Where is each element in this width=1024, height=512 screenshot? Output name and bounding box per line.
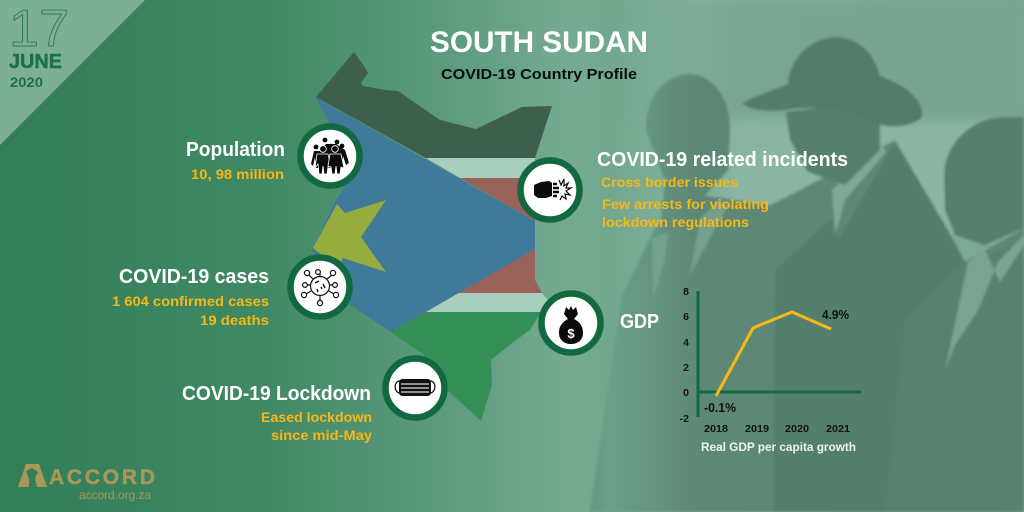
date block — [9, 0, 69, 90]
y axis labels: 0 — [683, 387, 689, 399]
data label 2018: -0.1% — [704, 401, 736, 415]
icon: mask — [386, 358, 444, 418]
incident item: border: Cross border issues — [601, 174, 738, 190]
panel: COVID-19 cases — [112, 258, 350, 328]
photo backdrop foliage — [620, 0, 1024, 232]
month: JUNE — [9, 51, 62, 73]
subtitle: COVID-19 Country Profile — [441, 66, 637, 83]
map: South Sudan flag in country outline — [312, 52, 552, 421]
incident item: arrests: Few arrests for violating — [602, 196, 769, 212]
map band: lower red — [458, 249, 542, 293]
figures base — [590, 140, 1024, 512]
logo wordmark: ACCORD — [49, 466, 155, 489]
icon: people — [300, 126, 360, 186]
y axis labels: 4 — [683, 337, 689, 349]
title: SOUTH SUDAN — [430, 26, 648, 59]
y axis labels: 6 — [683, 311, 689, 323]
logo url: accord.org.za — [79, 488, 151, 502]
GDP heading: GDP — [620, 311, 659, 333]
x axis labels: 2020 — [785, 423, 809, 435]
icon: virus — [290, 258, 350, 316]
left man shirt — [652, 200, 728, 300]
y axis labels — [680, 286, 689, 425]
right man shirt — [945, 235, 1024, 370]
deaths value: 19 deaths — [200, 312, 269, 328]
map band: blue triangle — [312, 97, 535, 332]
panel: GDP — [542, 286, 861, 454]
x axis labels: 2019 — [745, 423, 769, 435]
background photo: three men — [590, 0, 1024, 512]
centre man hat — [742, 37, 922, 126]
x axis labels: 2021 — [826, 423, 850, 435]
date corner triangle — [0, 0, 145, 145]
centre man collar — [832, 142, 886, 235]
cases value: 1 604 confirmed cases — [112, 293, 269, 309]
chart axes — [698, 291, 861, 417]
logo mark — [18, 464, 47, 487]
population value: 10, 98 million — [191, 166, 284, 182]
panel: COVID-19 related incidents — [520, 149, 848, 230]
y axis labels: -2 — [680, 413, 689, 425]
centre man face — [786, 100, 880, 185]
lockdown heading: COVID-19 Lockdown — [182, 383, 371, 405]
y axis labels: 8 — [683, 286, 689, 298]
logo: ACCORD — [18, 464, 155, 502]
left fade over photo — [560, 0, 700, 512]
lockdown status: since mid-May — [271, 427, 372, 443]
panel: population — [186, 126, 360, 186]
data line — [716, 312, 831, 396]
line chart: real GDP per capita growth — [680, 286, 861, 454]
map band: upper red — [460, 178, 535, 221]
right man suit — [885, 240, 1024, 512]
chart caption: Real GDP per capita growth — [701, 440, 856, 454]
right man head — [944, 117, 1024, 245]
map band: lower white — [426, 293, 549, 312]
year: 2020 — [10, 74, 43, 90]
data label 2021: 4.9% — [822, 308, 849, 322]
panel: COVID-19 lockdown — [182, 358, 444, 443]
map star — [313, 200, 386, 272]
incident item: arrests: lockdown regulations — [602, 214, 749, 230]
x axis labels — [704, 423, 850, 435]
map band: green — [391, 312, 541, 421]
map band: black — [316, 52, 552, 158]
icon: money bag — [542, 294, 600, 352]
population heading: Population — [186, 139, 285, 161]
x axis labels: 2018 — [704, 423, 728, 435]
icon: money bag: $ — [567, 326, 575, 341]
y axis labels: 2 — [683, 362, 689, 374]
lockdown status: Eased lockdown — [261, 409, 372, 425]
cases heading: COVID-19 cases — [119, 266, 269, 288]
map band: upper white — [426, 158, 535, 178]
left man head — [646, 74, 730, 235]
date number: 17 — [9, 0, 69, 58]
centre man suit — [773, 142, 965, 512]
icon: fist — [520, 160, 580, 220]
incidents heading: COVID-19 related incidents — [597, 149, 848, 171]
